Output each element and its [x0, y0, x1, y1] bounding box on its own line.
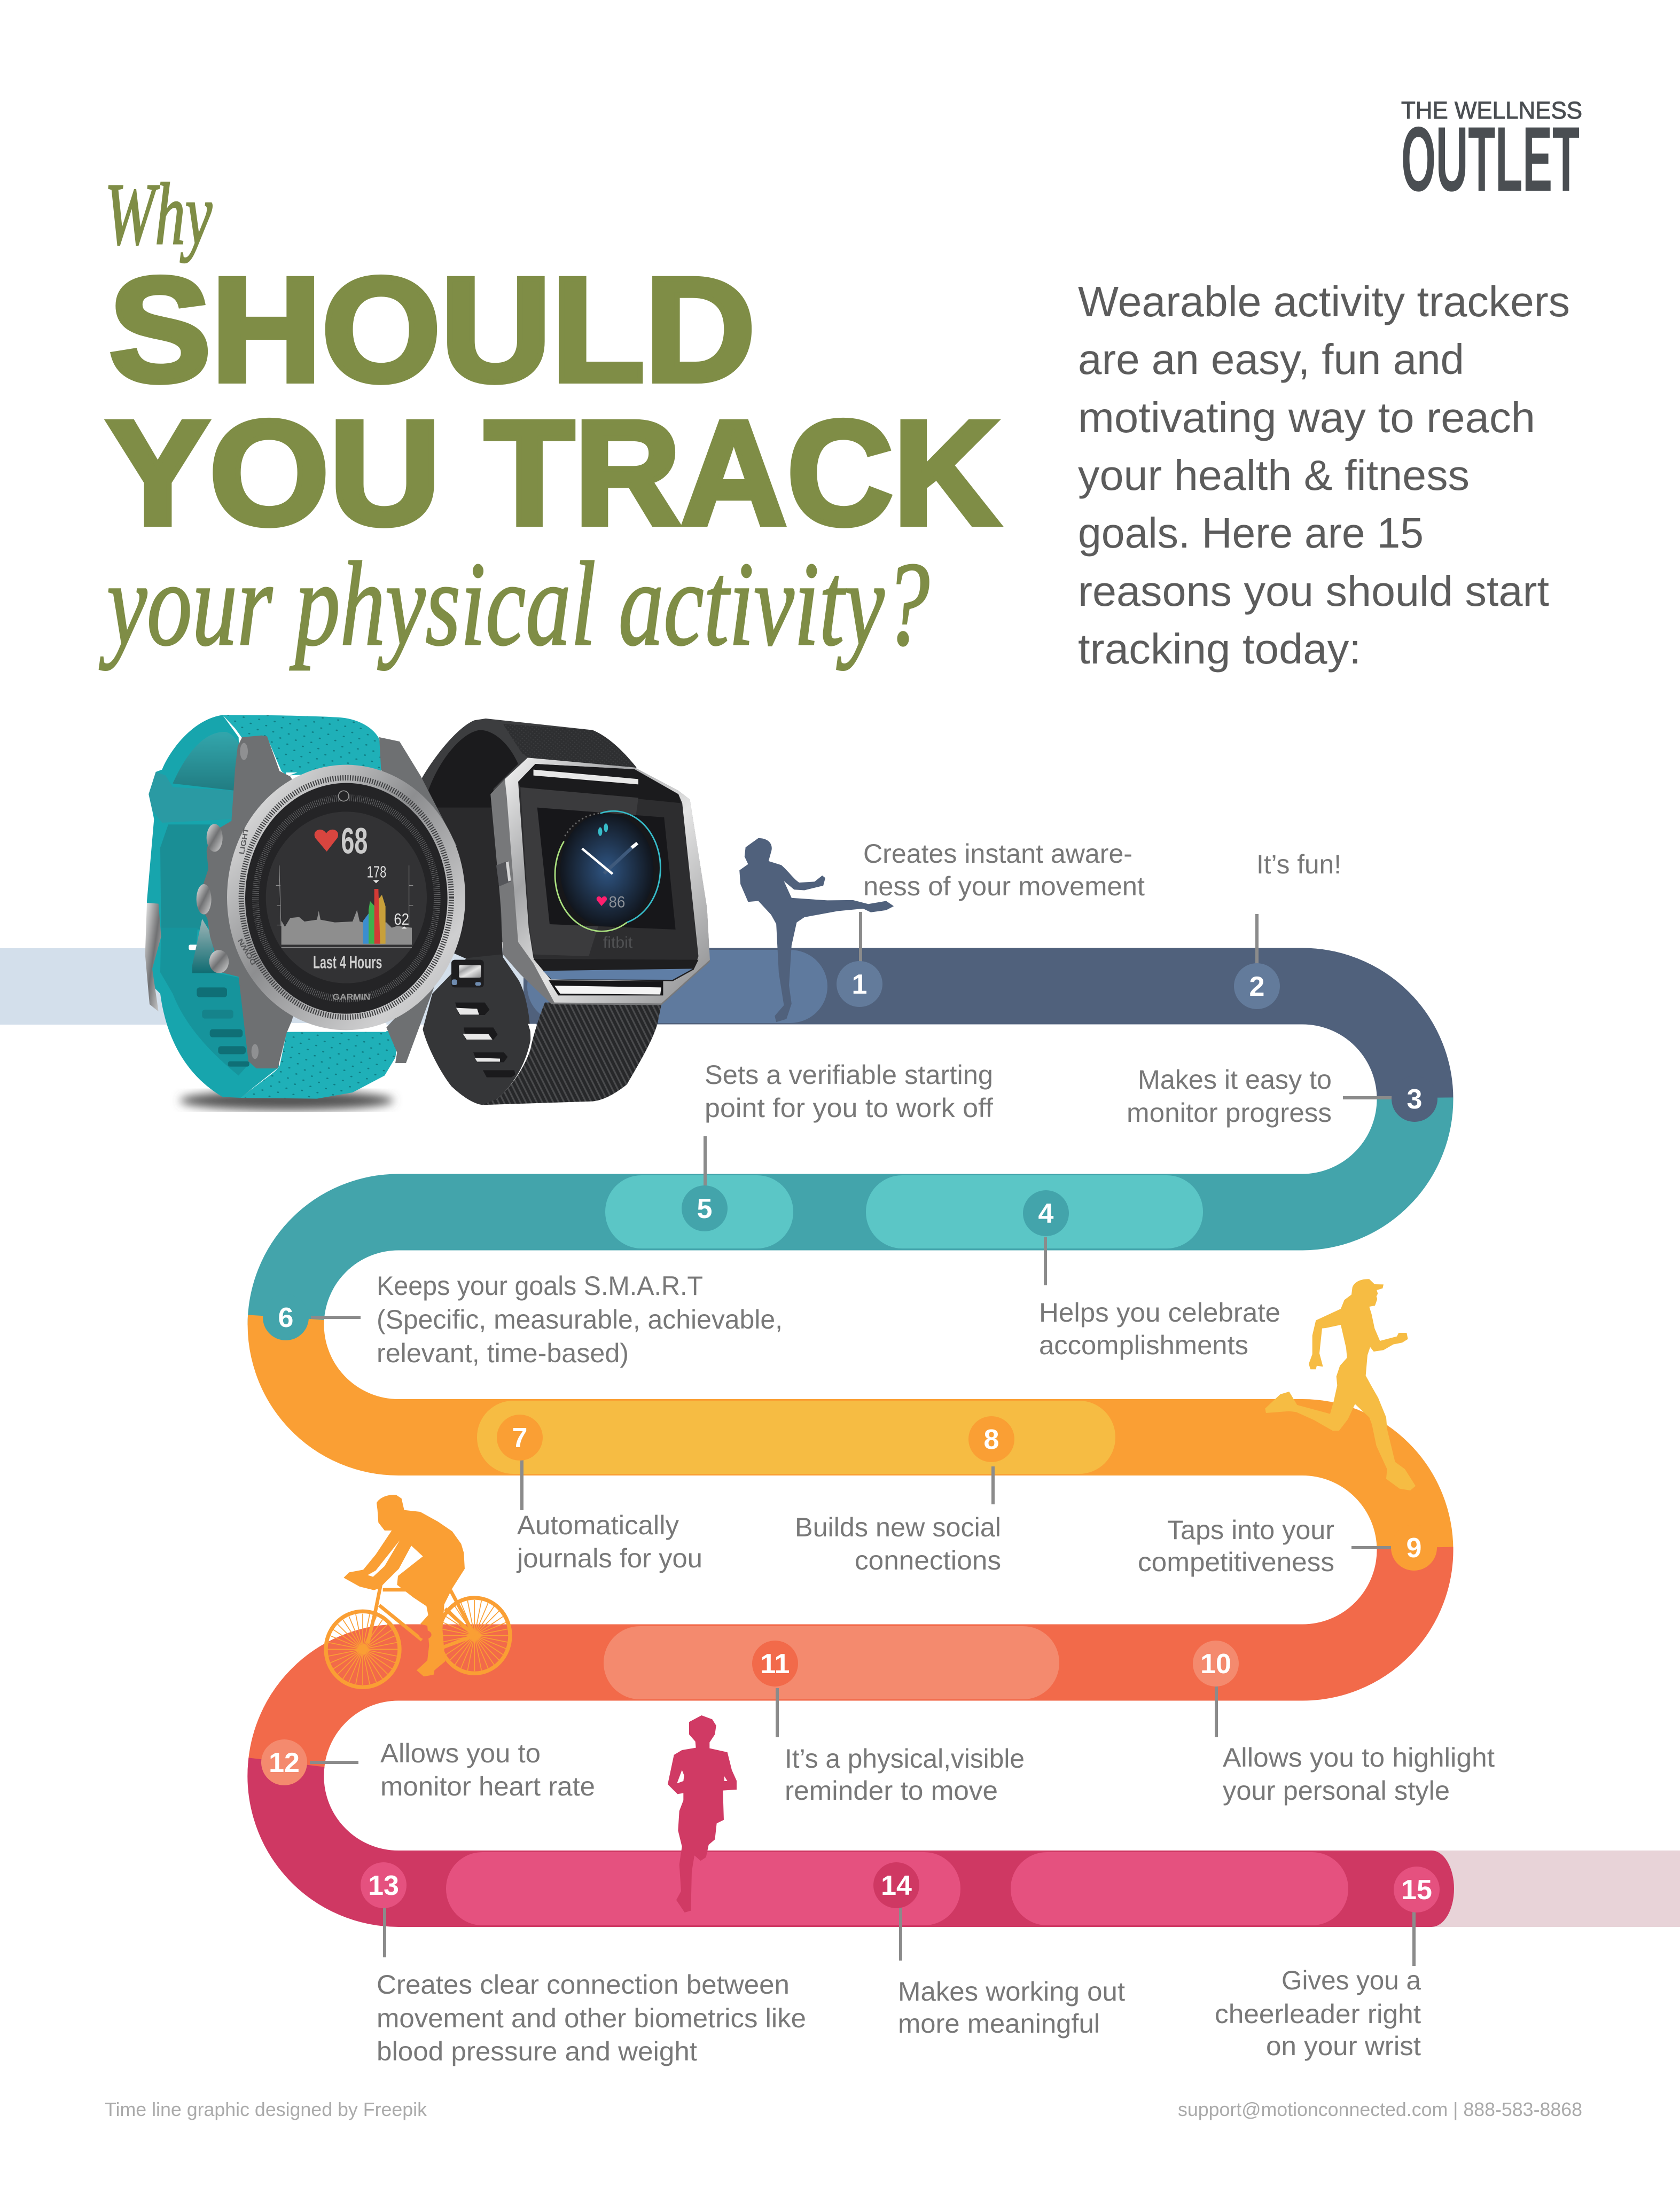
button shine	[506, 862, 511, 881]
intro paragraph: reasons you should start	[1078, 567, 1549, 615]
reason 8: connections	[855, 1545, 1001, 1575]
title: should: SHOULD	[109, 246, 755, 412]
gap in strap	[189, 944, 198, 950]
reason 4: Helps you celebrate	[1039, 1298, 1280, 1328]
bezel labels	[236, 827, 258, 966]
ribbon: teal section	[286, 1098, 1415, 1325]
ribbon: navy section	[523, 986, 1415, 1099]
logo: THE WELLNESS	[1401, 97, 1582, 124]
reason labels	[377, 839, 1495, 2066]
strap tail	[423, 955, 530, 1105]
front wheel	[326, 1611, 400, 1687]
clock face	[560, 813, 654, 926]
connector lines	[310, 912, 1414, 1966]
top marker	[339, 791, 349, 801]
reason 15: Gives you a	[1282, 1965, 1421, 1995]
ribbon start tail	[0, 948, 588, 1025]
chart axes	[276, 865, 413, 947]
case right lug top	[379, 737, 457, 846]
reason 14	[898, 1977, 1125, 2039]
gap above strap	[286, 772, 298, 776]
reason 14: more meaningful	[898, 2009, 1100, 2039]
garmin wordmark: GARMIN	[332, 993, 370, 1002]
reason 10	[1223, 1743, 1495, 1806]
strap top texture	[503, 724, 636, 769]
strap loop inner	[173, 732, 239, 791]
glass bottom	[534, 959, 698, 981]
bike frame	[368, 1581, 474, 1647]
back strap	[147, 715, 279, 1098]
reason 11: reminder to move	[785, 1776, 998, 1806]
reason 15: on your wrist	[1266, 2031, 1421, 2061]
case highlights	[505, 758, 710, 1003]
marker 3	[1392, 1076, 1437, 1122]
intro paragraph	[1078, 278, 1570, 673]
ribbon: coral section	[286, 1548, 1415, 1775]
chart value 178	[367, 863, 386, 883]
tail holes	[455, 1003, 515, 1078]
clock ring	[555, 811, 660, 931]
marker 7: 7	[512, 1423, 527, 1454]
reason 3: monitor progress	[1127, 1098, 1332, 1128]
reason 5	[705, 1060, 993, 1123]
marker 5	[682, 1185, 728, 1231]
lug screws	[240, 743, 259, 1059]
marker 5: 5	[697, 1193, 712, 1224]
marker 3: 3	[1407, 1084, 1422, 1115]
reflective triangle	[192, 919, 219, 973]
title: you: YOU	[106, 389, 441, 556]
clock hands	[582, 843, 637, 874]
reason 6: Keeps your goals S.M.A.R.T	[377, 1271, 703, 1301]
arm gap	[368, 1540, 400, 1577]
reason 15	[1215, 1965, 1421, 2061]
title	[99, 165, 999, 670]
reason 9: competitiveness	[1138, 1547, 1334, 1577]
strap keeper	[149, 772, 234, 823]
marker 13: 13	[368, 1870, 399, 1901]
strap interior lower	[427, 808, 503, 960]
marker 1	[837, 961, 882, 1007]
footer credit: Time line graphic designed by Freepik	[105, 2098, 427, 2120]
heart rate	[597, 893, 625, 911]
reason 7	[516, 1510, 702, 1573]
ribbon: pink section	[286, 1762, 1416, 1889]
chart caption: Last 4 Hours	[313, 953, 382, 973]
marker 13	[361, 1862, 407, 1908]
reason 11	[785, 1744, 1025, 1806]
marker 11: 11	[761, 1649, 790, 1680]
reason 13: Creates clear connection between	[377, 1970, 790, 2000]
marker 6	[263, 1294, 309, 1340]
keeper	[451, 960, 484, 987]
glass	[518, 764, 698, 981]
highlight segments	[446, 950, 1348, 1925]
reason 13	[377, 1970, 806, 2066]
marker 12	[261, 1739, 307, 1785]
arm gaps	[677, 1770, 728, 1783]
reason 6	[377, 1271, 783, 1368]
logo	[1401, 97, 1582, 210]
chart value 178: 178	[367, 863, 386, 881]
ribbon pink round end	[1416, 1851, 1454, 1927]
bezel labels: DOWN	[236, 937, 258, 966]
glass dark top	[518, 764, 681, 803]
heart rate: 86	[609, 893, 625, 911]
reason 12: monitor heart rate	[380, 1771, 595, 1801]
screen	[266, 811, 427, 983]
case left side	[198, 736, 335, 1068]
reason 4	[1039, 1298, 1280, 1360]
fitbit wordmark: fitbit	[603, 933, 633, 951]
marker 15	[1394, 1867, 1440, 1912]
rider body	[343, 1495, 465, 1676]
dial ticks	[255, 798, 437, 999]
intro paragraph: tracking today:	[1078, 625, 1361, 673]
reason 8: Builds new social	[795, 1512, 1001, 1542]
reason 9	[1138, 1515, 1334, 1577]
marker 9	[1391, 1525, 1437, 1571]
reason 10: your personal style	[1223, 1776, 1450, 1806]
intro paragraph: motivating way to reach	[1078, 394, 1535, 441]
reason 6: relevant, time-based)	[377, 1338, 629, 1368]
strap interior	[427, 730, 518, 810]
reason 7: Automatically	[517, 1510, 679, 1540]
reason 10: Allows you to highlight	[1223, 1743, 1495, 1773]
side button	[496, 861, 511, 886]
top bar	[534, 770, 638, 784]
heart rate 68: 68	[341, 821, 368, 862]
marker 6: 6	[278, 1302, 293, 1333]
shadow	[180, 1091, 394, 1110]
reason 3	[1127, 1065, 1332, 1128]
ribbon seen through case	[543, 969, 693, 980]
reason 13: movement and other biometrics like	[377, 2003, 806, 2033]
tail slits	[456, 1008, 500, 1061]
reason 4: accomplishments	[1039, 1330, 1248, 1360]
reason 3: Makes it easy to	[1138, 1065, 1332, 1095]
strap lower panel	[160, 928, 251, 1075]
marker 4	[1023, 1190, 1069, 1236]
marker 15: 15	[1401, 1875, 1432, 1906]
marker 8: 8	[984, 1424, 999, 1455]
reason 7: journals for you	[516, 1543, 702, 1573]
watch: fitbit black	[420, 719, 710, 1105]
reason 11: It’s a physical,visible	[785, 1744, 1025, 1774]
intro paragraph: your health & fitness	[1078, 451, 1470, 499]
marker 2	[1234, 963, 1280, 1009]
pedal gap	[419, 1630, 432, 1639]
reason 13: blood pressure and weight	[377, 2036, 697, 2066]
reason 15: cheerleader right	[1215, 1999, 1421, 2029]
intro paragraph: are an easy, fun and	[1078, 335, 1464, 383]
marker 10	[1193, 1641, 1239, 1687]
gap under bezel	[286, 1023, 386, 1032]
knurled ring	[241, 778, 451, 1017]
buckle	[145, 903, 161, 1011]
reason 6: (Specific, measurable, achievable,	[377, 1305, 783, 1334]
reason 5: Sets a verifiable starting	[705, 1060, 993, 1090]
reason 1	[863, 839, 1145, 901]
marker 11	[752, 1641, 798, 1687]
marker 14: 14	[881, 1870, 912, 1901]
silhouette: female runner	[1265, 1279, 1416, 1490]
marker 10: 10	[1200, 1649, 1231, 1680]
number markers	[261, 961, 1440, 1912]
reason 12: Allows you to	[380, 1738, 541, 1768]
title: why: Why	[105, 165, 213, 263]
marker 9: 9	[1406, 1533, 1421, 1564]
reason 1: ness of your movement	[863, 871, 1145, 901]
case right lug bottom	[386, 967, 442, 1063]
chart value 62: 62	[394, 910, 409, 928]
ribbon end tail	[1416, 1851, 1680, 1927]
strap holes	[197, 987, 249, 1067]
marker 4: 4	[1038, 1198, 1054, 1229]
title: your physical activity: your physical activity?	[99, 537, 929, 670]
reason 8	[795, 1512, 1001, 1575]
silhouette: kicking woman	[739, 838, 894, 1022]
reason 5: point for you to work off	[705, 1093, 993, 1123]
marker 8	[968, 1416, 1014, 1462]
screen	[537, 808, 676, 930]
chart bars	[363, 889, 386, 944]
timeline ribbon	[0, 948, 1680, 1927]
bottom bar	[549, 980, 663, 995]
marker 2: 2	[1249, 971, 1264, 1002]
marker 14	[873, 1862, 919, 1908]
title: track: TRACK	[485, 389, 999, 556]
marker 1: 1	[852, 969, 867, 1000]
reason 14: Makes working out	[898, 1977, 1125, 2007]
intro paragraph: Wearable activity trackers	[1078, 278, 1570, 325]
intro paragraph: goals. Here are 15	[1078, 509, 1424, 557]
glass sheen	[520, 787, 638, 956]
dial	[245, 783, 448, 1014]
reason 1: Creates instant aware-	[863, 839, 1132, 869]
rear wheel	[439, 1598, 510, 1673]
bezel labels: LIGHT	[238, 827, 250, 855]
strap inner panel	[160, 824, 210, 930]
ribbon: orange section	[286, 1317, 1415, 1550]
main bottom strap	[482, 1003, 661, 1105]
silver case	[490, 758, 710, 1005]
side buttons	[197, 824, 229, 973]
white gap	[528, 1024, 536, 1038]
reason 2: It’s fun!	[1256, 849, 1341, 879]
step icon	[598, 823, 608, 836]
footer contact: support@motionconnected.com | 888-583-8868	[1178, 2098, 1582, 2120]
watch: garmin teal	[145, 715, 465, 1110]
marker 12: 12	[269, 1747, 300, 1778]
silhouette: front runner	[668, 1715, 737, 1912]
chart area	[282, 910, 412, 944]
bottom strap	[240, 1031, 397, 1099]
bezel	[227, 765, 465, 1030]
silhouette: cyclist	[326, 1495, 510, 1687]
reason 12	[380, 1738, 595, 1801]
strap loop	[420, 719, 636, 942]
reason 9: Taps into your	[1167, 1515, 1334, 1545]
top strap	[223, 715, 383, 776]
marker 7	[497, 1415, 543, 1461]
heart icon	[315, 830, 338, 852]
